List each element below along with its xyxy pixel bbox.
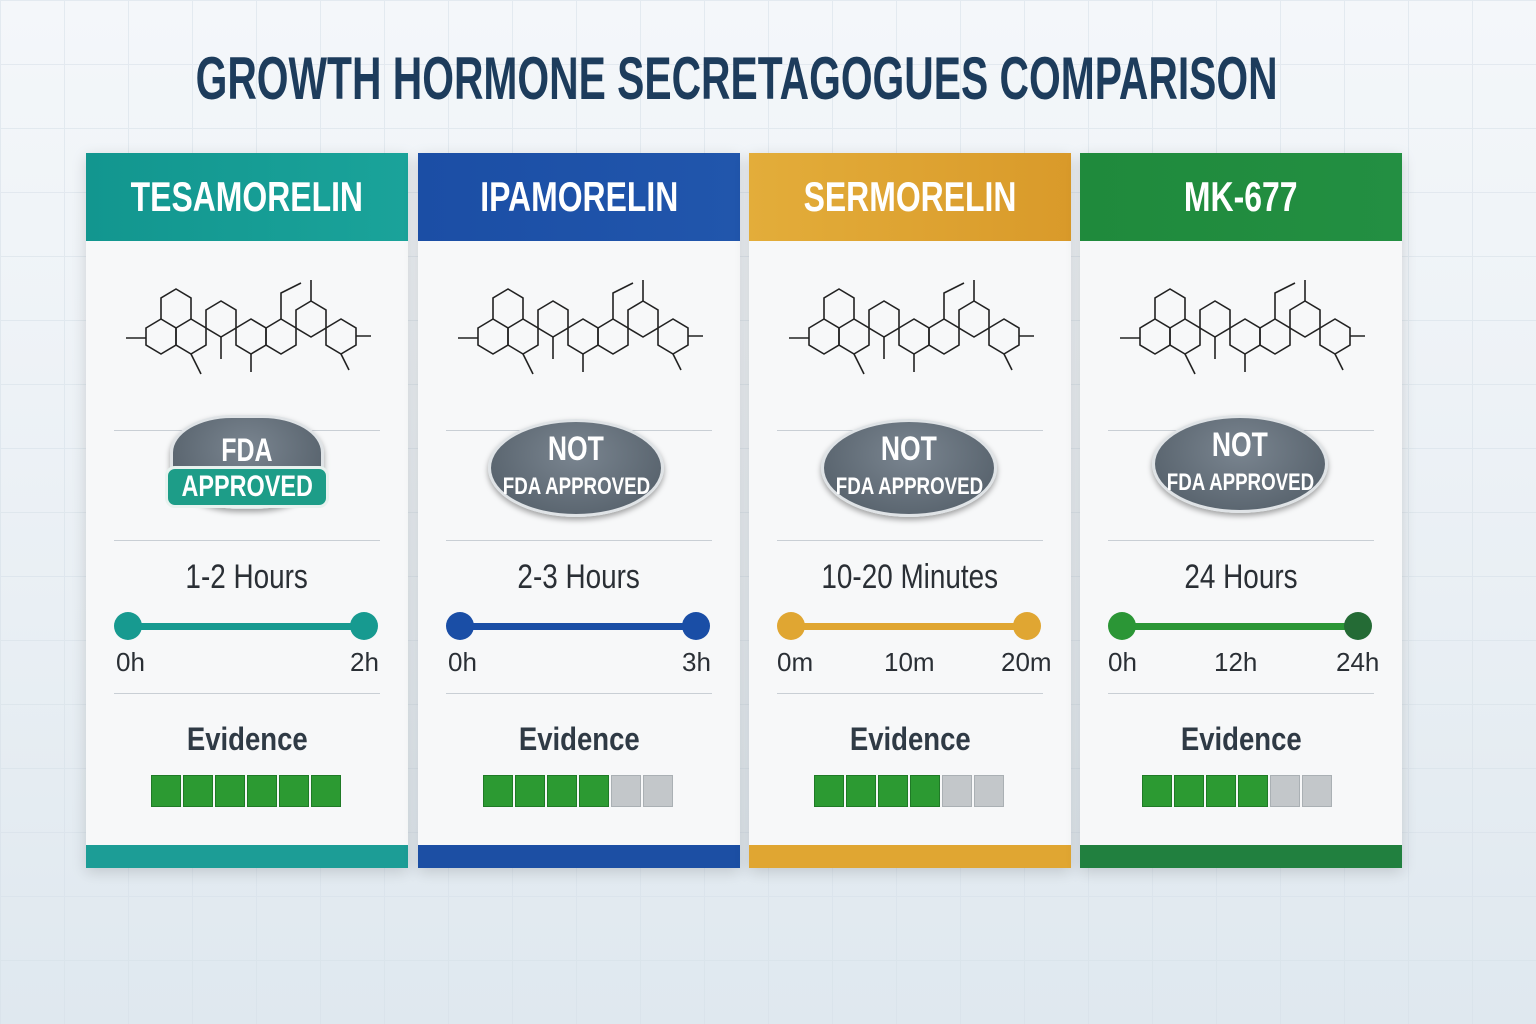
molecule diagram xyxy=(789,280,1034,374)
badge: not FDA approved: NOT xyxy=(881,430,937,468)
evidence: Evidence xyxy=(187,721,307,757)
timeline xyxy=(128,623,364,630)
timeline xyxy=(1122,623,1358,630)
duration: 2-3 Hours xyxy=(518,558,640,596)
duration: 1-2 Hours xyxy=(186,558,308,596)
panel: sermorelin: 0m xyxy=(777,647,813,677)
duration: 24 Hours xyxy=(1184,558,1298,596)
duration: 10-20 Minutes xyxy=(822,558,998,596)
panel: ipamorelin: 3h xyxy=(682,647,711,677)
panel: ipamorelin xyxy=(418,153,740,868)
header: tesamorelin xyxy=(86,153,408,241)
header: mk-677 xyxy=(1080,153,1402,241)
header: sermorelin xyxy=(749,153,1071,241)
panel: mk-677 xyxy=(1080,153,1402,868)
badge: not FDA approved: NOT xyxy=(548,430,604,468)
badge: not FDA approved xyxy=(488,419,664,517)
badge: FDA approved: APPROVED xyxy=(181,470,313,503)
evidence bars xyxy=(151,775,341,807)
panel: sermorelin: 20m xyxy=(1001,647,1052,677)
evidence: Evidence xyxy=(519,721,639,757)
header: ipamorelin xyxy=(418,153,740,241)
panel: mk-677: 0h xyxy=(1108,647,1137,677)
badge: not FDA approved xyxy=(1152,415,1328,513)
panel: sermorelin xyxy=(749,153,1071,868)
panel: tesamorelin: 2h xyxy=(350,647,379,677)
header: tesamorelin: TESAMORELIN xyxy=(131,173,363,220)
molecule diagram xyxy=(458,280,703,374)
badge: not FDA approved: FDA APPROVED xyxy=(835,473,983,500)
badge: not FDA approved: NOT xyxy=(1212,426,1268,464)
panel: sermorelin: 10m xyxy=(884,647,935,677)
panel: mk-677: 24h xyxy=(1336,647,1379,677)
evidence: Evidence xyxy=(850,721,970,757)
badge: FDA approved: FDA xyxy=(221,432,273,468)
panel: ipamorelin: 0h xyxy=(448,647,477,677)
badge: FDA approved xyxy=(170,415,324,509)
badge: not FDA approved xyxy=(821,419,997,517)
timeline xyxy=(791,623,1027,630)
evidence bars xyxy=(814,775,1004,807)
molecule diagram xyxy=(1120,280,1365,374)
panel: tesamorelin xyxy=(86,153,408,868)
molecule diagram xyxy=(126,280,371,374)
badge: not FDA approved: FDA APPROVED xyxy=(1166,469,1314,496)
panel: tesamorelin: 0h xyxy=(116,647,145,677)
badge: not FDA approved: FDA APPROVED xyxy=(502,473,650,500)
evidence bars xyxy=(1142,775,1332,807)
evidence bars xyxy=(483,775,673,807)
title: GROWTH HORMONE SECRETAGOGUES COMPARISON xyxy=(196,45,1278,112)
header: mk-677: MK-677 xyxy=(1184,173,1298,220)
timeline xyxy=(460,623,696,630)
panel: mk-677: 12h xyxy=(1214,647,1257,677)
header: ipamorelin: IPAMORELIN xyxy=(480,173,678,220)
evidence: Evidence xyxy=(1181,721,1301,757)
header: sermorelin: SERMORELIN xyxy=(804,173,1016,220)
